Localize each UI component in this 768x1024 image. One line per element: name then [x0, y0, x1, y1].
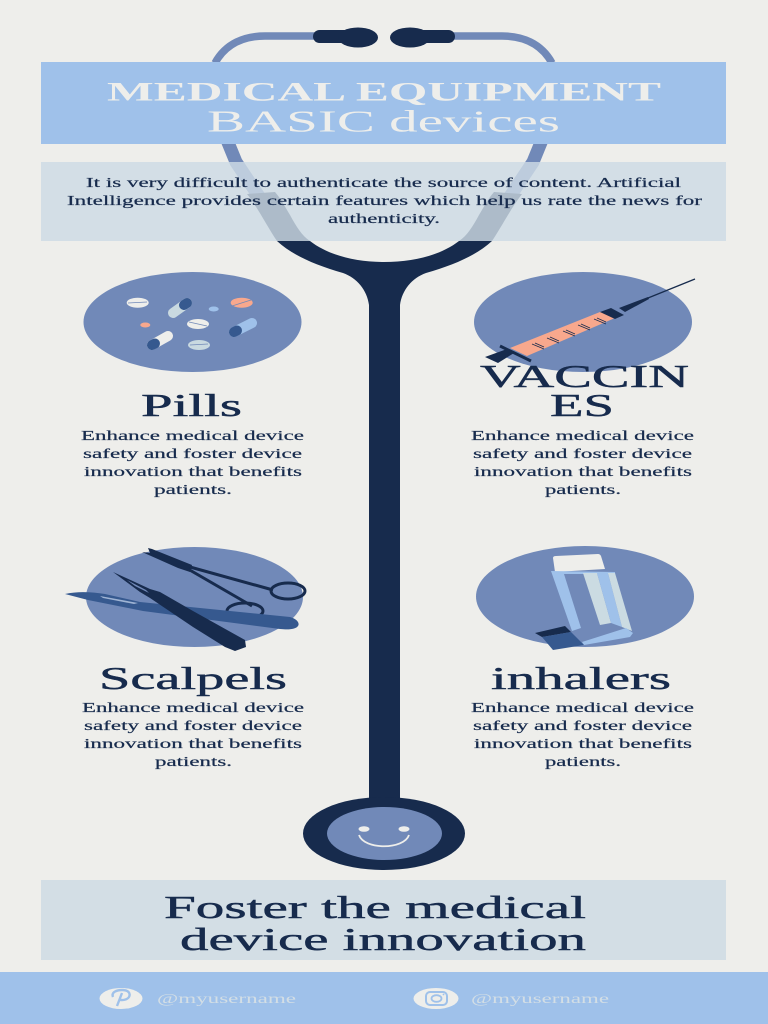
panel: pills — [81, 272, 304, 497]
icon: scalpels and scissors — [65, 547, 305, 651]
title line 2: BASIC devices — [207, 104, 560, 138]
intro panel — [41, 162, 726, 241]
pinterest handle: @myusername — [157, 991, 296, 1006]
vaccines description: safety and foster device — [473, 446, 692, 461]
vaccines description: innovation that benefits — [474, 464, 692, 479]
closing statement panel: device innovation — [180, 922, 586, 957]
intro panel: authenticity. — [328, 211, 440, 226]
scalpels description: Enhance medical device — [82, 700, 304, 715]
inhalers description: innovation that benefits — [474, 736, 692, 751]
stethoscope tubes — [215, 36, 552, 198]
inhalers description: patients. — [545, 754, 621, 769]
left earpiece — [313, 28, 378, 48]
heading: vaccines — [480, 359, 689, 423]
heading: vaccines: ES — [550, 388, 614, 423]
pills description — [81, 428, 304, 497]
stethoscope yoke and stem — [247, 192, 522, 800]
vaccines description — [471, 428, 694, 497]
icon: pinterest — [100, 988, 142, 1009]
icon: syringe — [474, 272, 695, 372]
pills description: safety and foster device — [83, 446, 302, 461]
icon: inhaler — [476, 546, 694, 650]
closing statement panel: Foster the medical — [164, 890, 586, 925]
scalpels description: patients. — [155, 754, 232, 769]
scalpels description — [82, 700, 304, 769]
title banner — [41, 62, 726, 144]
pills description: innovation that benefits — [84, 464, 302, 479]
panel: scalpels — [65, 547, 305, 769]
heading: pills: Pills — [141, 388, 242, 423]
inhalers description: Enhance medical device — [471, 700, 694, 715]
inhalers description — [471, 700, 694, 769]
vaccines description: Enhance medical device — [471, 428, 694, 443]
heading: inhalers: inhalers — [491, 661, 671, 696]
heading: scalpels: Scalpels — [99, 661, 287, 696]
scalpels description: innovation that benefits — [84, 736, 302, 751]
inhalers description: safety and foster device — [473, 718, 692, 733]
panel: vaccines — [471, 272, 695, 497]
pills description: patients. — [154, 482, 232, 497]
footer bar — [0, 972, 768, 1024]
intro panel: Intelligence provides certain features which help us rate the news for — [67, 193, 703, 208]
vaccines description: patients. — [545, 482, 621, 497]
icon: instagram — [414, 988, 458, 1009]
stethoscope — [215, 28, 552, 870]
right earpiece — [390, 28, 455, 48]
scalpels description: safety and foster device — [84, 718, 302, 733]
icon: pills — [84, 272, 302, 372]
chest piece with smile — [303, 797, 465, 870]
heading: vaccines: VACCIN — [480, 359, 689, 394]
intro panel: It is very difficult to authenticate the source of content. Artificial — [86, 175, 681, 190]
instagram handle: @myusername — [471, 991, 609, 1006]
closing statement panel — [41, 880, 726, 960]
panel: inhalers — [471, 546, 694, 769]
pills description: Enhance medical device — [81, 428, 304, 443]
title line 1: MEDICAL EQUIPMENT — [107, 78, 661, 106]
